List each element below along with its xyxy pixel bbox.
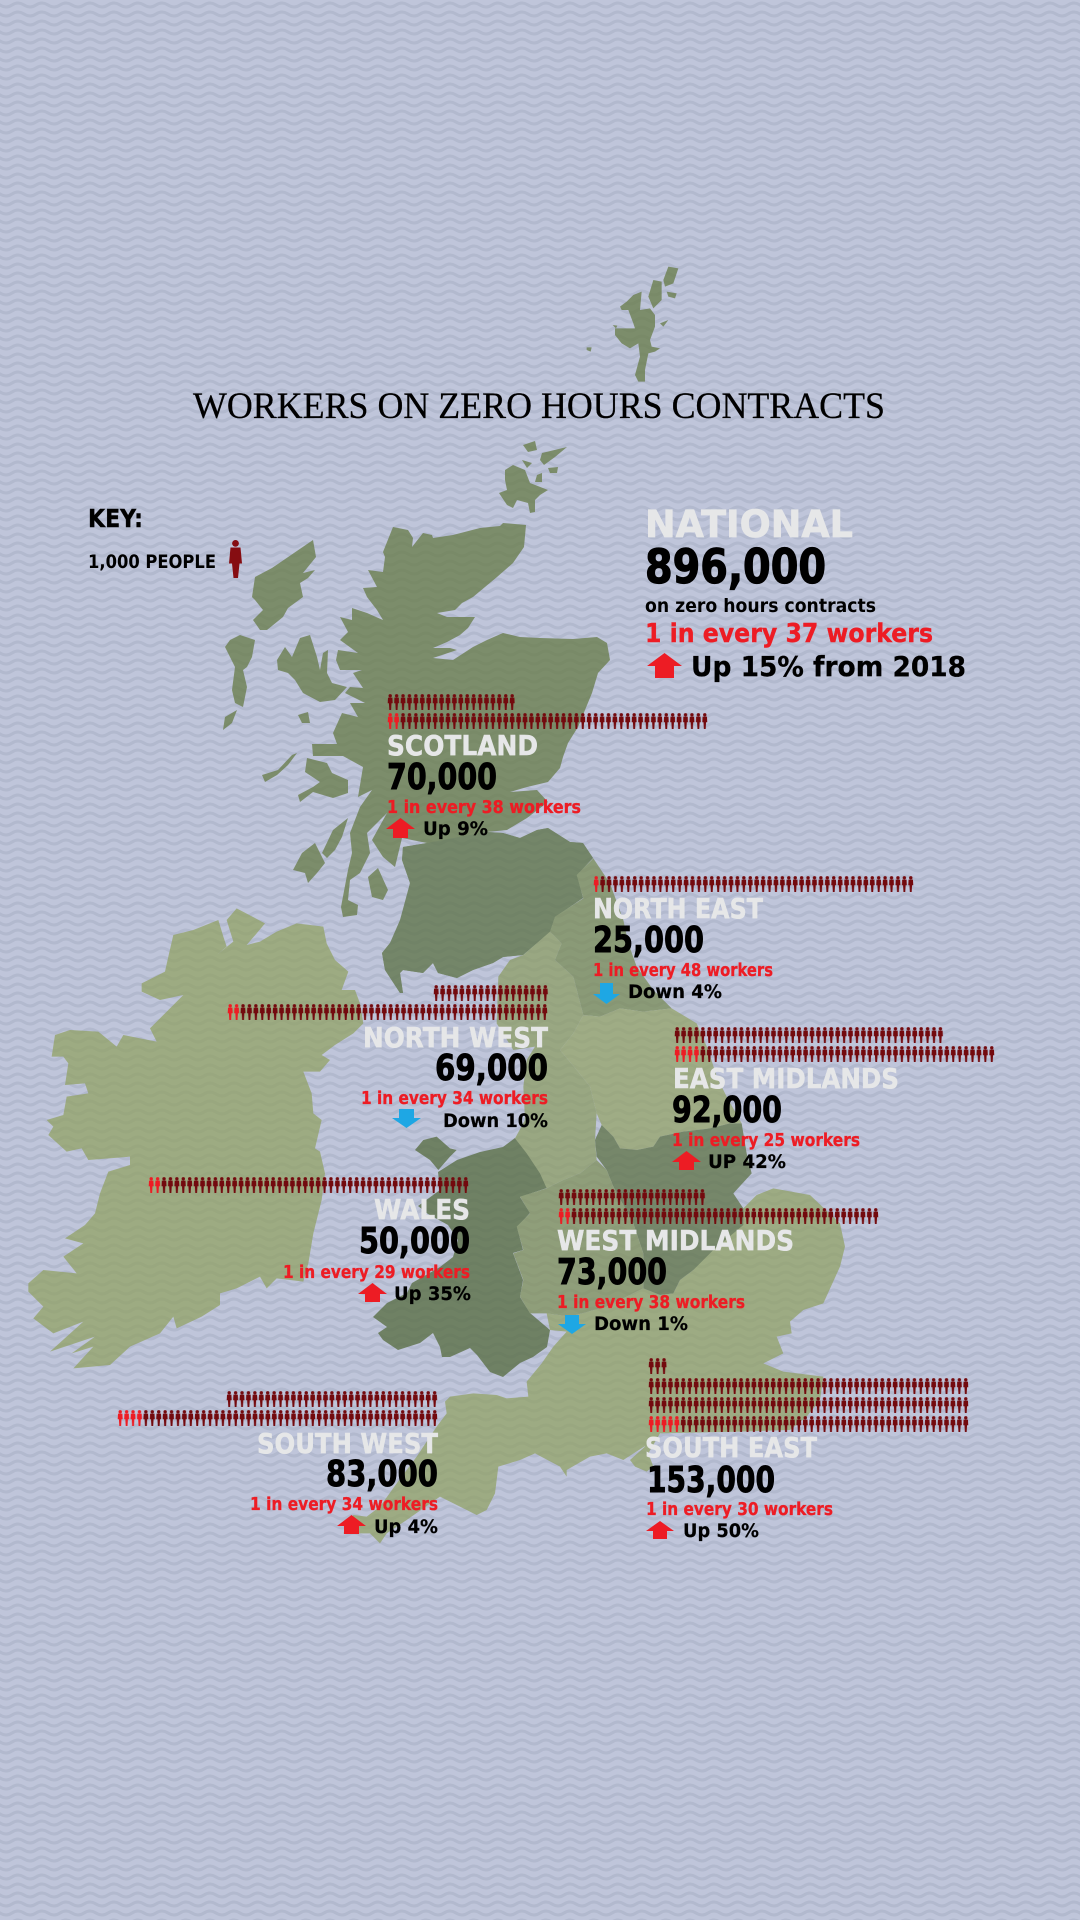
panel: South East	[645, 1358, 969, 1542]
key heading: KEY:	[88, 504, 143, 533]
map: Shetland	[587, 267, 678, 382]
map: West Midlands	[513, 1160, 643, 1317]
national total: 896,000	[645, 540, 826, 595]
icon: up arrow	[337, 1515, 366, 1534]
people bars	[674, 1027, 995, 1062]
region name: SOUTH WEST	[257, 1428, 438, 1460]
region total: 70,000	[387, 757, 497, 798]
map: Wales	[373, 1137, 550, 1377]
region total: 69,000	[435, 1048, 548, 1089]
region ratio: 1 in every 38 workers	[387, 798, 581, 818]
region total: 25,000	[593, 920, 704, 961]
region ratio: 1 in every 30 workers	[646, 1500, 833, 1520]
region total: 73,000	[557, 1252, 667, 1293]
national caption: on zero hours contracts	[645, 595, 876, 617]
icon: up arrow	[358, 1283, 387, 1302]
region change: Up 4%	[374, 1517, 438, 1538]
region ratio: 1 in every 48 workers	[593, 961, 773, 981]
national change: Up 15% from 2018	[691, 650, 966, 683]
people bars	[227, 985, 549, 1020]
key	[88, 504, 242, 578]
region name: EAST MIDLANDS	[673, 1063, 899, 1095]
people bars	[593, 876, 914, 892]
people bars	[117, 1391, 438, 1426]
region total: 92,000	[672, 1090, 782, 1131]
icon: up arrow	[646, 1521, 674, 1539]
national heading: NATIONAL	[645, 503, 853, 546]
people bars	[648, 1358, 969, 1432]
region change: Down 10%	[443, 1111, 548, 1132]
region name: NORTH WEST	[363, 1022, 548, 1054]
region ratio: 1 in every 34 workers	[250, 1495, 438, 1515]
icon: up arrow	[672, 1151, 701, 1170]
region change: Up 35%	[394, 1284, 471, 1305]
region change: Up 50%	[683, 1521, 759, 1542]
region ratio: 1 in every 38 workers	[557, 1293, 745, 1313]
icon: down arrow	[392, 1109, 421, 1128]
icon: person	[229, 540, 242, 578]
region ratio: 1 in every 34 workers	[361, 1089, 548, 1109]
region total: 153,000	[647, 1460, 775, 1501]
region total: 83,000	[326, 1454, 438, 1495]
region ratio: 1 in every 25 workers	[672, 1131, 860, 1151]
panel: Wales	[148, 1177, 471, 1305]
panel: East Midlands	[672, 1027, 995, 1173]
region change: Down 1%	[594, 1314, 688, 1335]
people bars	[148, 1177, 469, 1193]
map: Scotland	[312, 523, 610, 993]
region change: UP 42%	[708, 1152, 786, 1173]
panel: South West	[117, 1391, 438, 1538]
icon: down arrow	[558, 1315, 586, 1334]
map: Outer Hebrides and west coast islands	[223, 540, 388, 900]
region ratio: 1 in every 29 workers	[283, 1263, 470, 1283]
region name: SOUTH EAST	[645, 1432, 817, 1464]
map: North West England	[497, 932, 597, 1188]
region name: NORTH EAST	[593, 893, 763, 925]
map: Yorkshire	[560, 1008, 742, 1150]
region change: Up 9%	[423, 819, 488, 840]
map: North East England	[550, 858, 672, 1017]
region change: Down 4%	[628, 982, 722, 1003]
map: Ireland	[28, 908, 363, 1368]
map: South and East of England	[343, 1188, 845, 1543]
panel: North West	[227, 985, 549, 1132]
map: British Isles	[28, 267, 845, 1543]
icon: up arrow	[647, 653, 682, 678]
map: Orkney	[499, 441, 567, 513]
people bars	[387, 694, 708, 729]
region name: WALES	[374, 1194, 470, 1226]
region total: 50,000	[359, 1221, 470, 1262]
national ratio: 1 in every 37 workers	[645, 619, 933, 649]
people bars	[558, 1189, 879, 1224]
panel: West Midlands	[557, 1189, 879, 1335]
icon: down arrow	[593, 983, 620, 1004]
map: southern Scotland	[382, 828, 593, 993]
title: WORKERS ON ZERO HOURS CONTRACTS	[193, 386, 885, 427]
panel: North East	[593, 876, 914, 1004]
icon: up arrow	[386, 818, 415, 838]
panel: Scotland	[386, 694, 708, 840]
map: East Midlands	[595, 1123, 752, 1295]
region name: SCOTLAND	[387, 730, 538, 762]
panel: national	[645, 503, 966, 683]
region name: WEST MIDLANDS	[557, 1225, 794, 1257]
key label: 1,000 PEOPLE	[88, 551, 216, 573]
